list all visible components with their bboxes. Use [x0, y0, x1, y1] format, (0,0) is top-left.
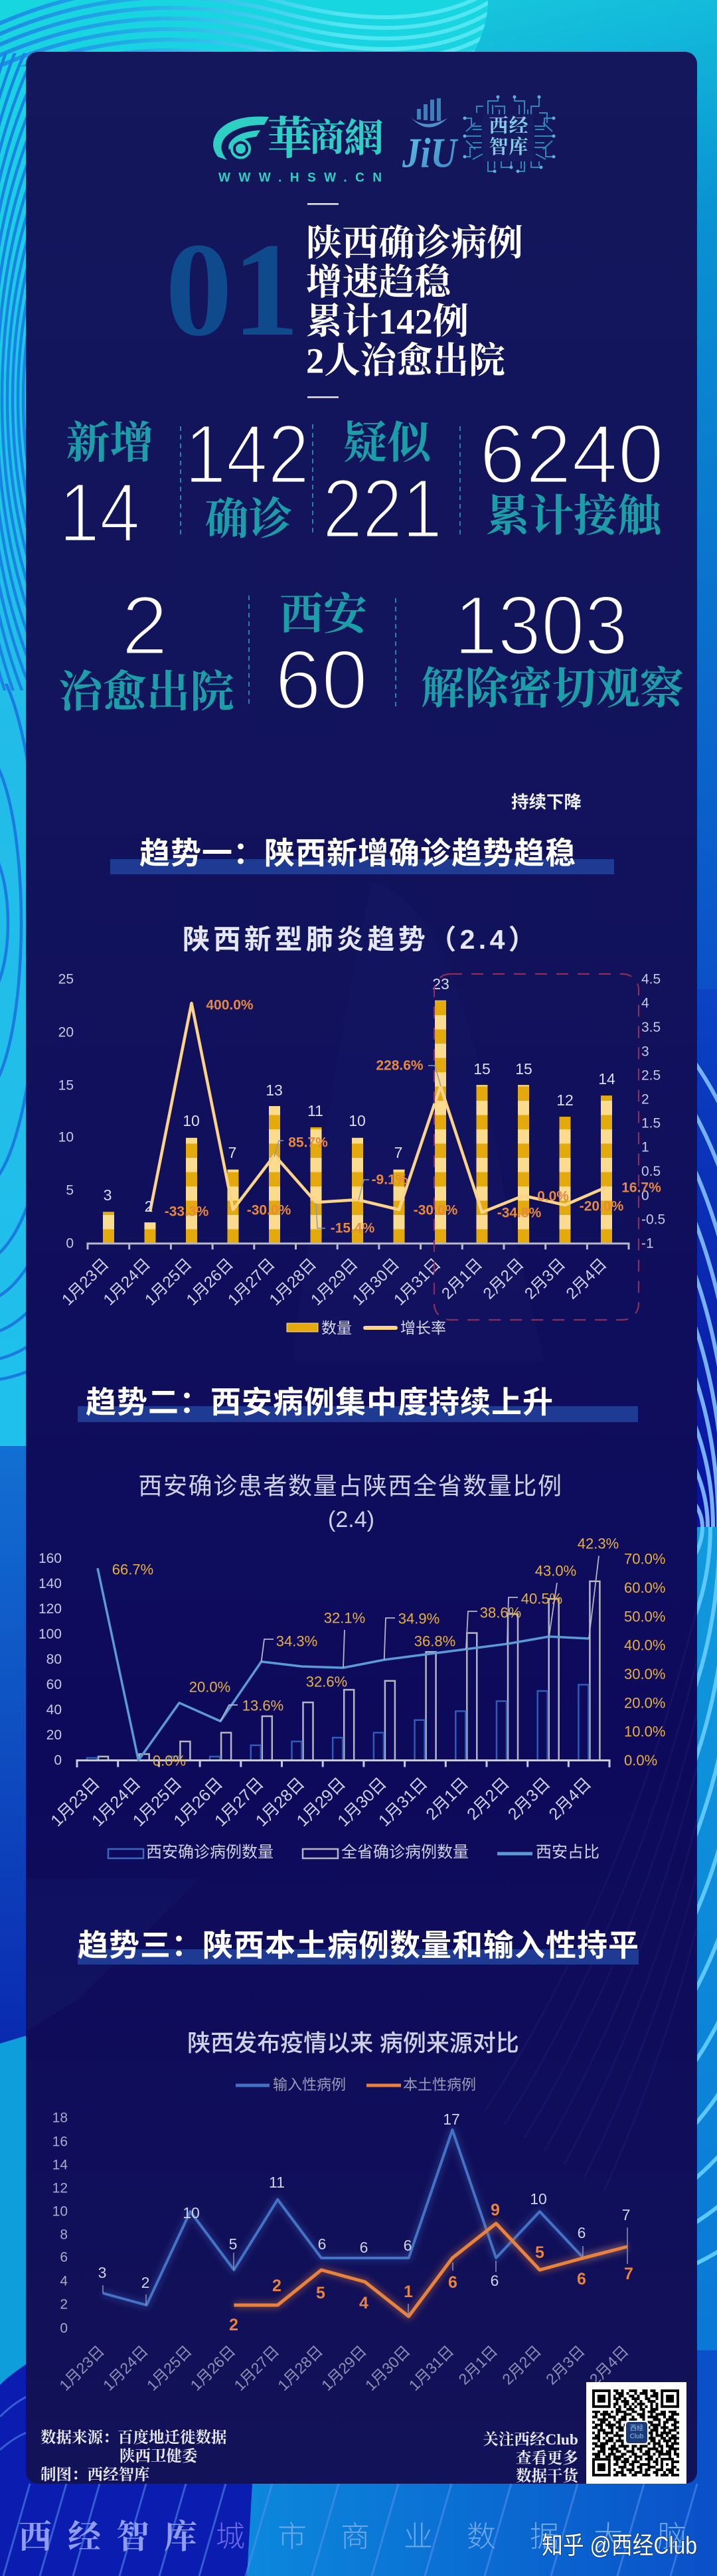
right axis: 1 [641, 1139, 649, 1155]
right axis: 3 [641, 1044, 649, 1060]
imported labels: 17 [443, 2111, 460, 2128]
right axis: 40.0% [624, 1637, 665, 1653]
chart: imported versus local cases [52, 2077, 633, 2394]
left axis: 40 [46, 1702, 62, 1718]
stat: Xi'an: 60 [275, 633, 368, 726]
legend: 数量 [321, 1319, 352, 1336]
headline: 陕西确诊病例 [306, 223, 523, 263]
bar value labels: 13 [266, 1082, 283, 1099]
heading: trend one: 趋势一：陕西新增确诊趋势趋稳 [139, 836, 576, 870]
date labels: 1月30日 [334, 1774, 390, 1830]
share labels: 36.8% [414, 1633, 455, 1649]
data sources: 数据来源： [40, 2429, 118, 2447]
date labels: 2月2日 [480, 1255, 528, 1303]
date labels: 1月27日 [211, 1774, 268, 1830]
date labels: 1月23日 [58, 1255, 113, 1309]
bar value labels: 11 [307, 1102, 323, 1119]
legend: 西安确诊病例数量 [146, 1843, 274, 1862]
left axis: 0 [66, 1236, 74, 1251]
date labels: 1月25日 [141, 1255, 196, 1309]
footer band: brand slogan: 城 [216, 2520, 245, 2553]
date labels [58, 1255, 611, 1309]
QR code [586, 2382, 686, 2484]
footer band: brand slogan: 脑 [657, 2520, 686, 2553]
imported labels: 6 [404, 2237, 412, 2254]
chart: Xi'an cases versus province [39, 1535, 665, 1862]
imported labels: 6 [578, 2224, 586, 2241]
QR code: 西经 [630, 2423, 643, 2433]
imported labels: 10 [183, 2204, 200, 2221]
stat: confirmed: 确诊 [204, 495, 292, 544]
date labels: 2月2日 [463, 1774, 513, 1824]
stat: released from observation: 1303 [454, 579, 628, 672]
share labels: 34.9% [398, 1611, 439, 1627]
imported labels: 6 [360, 2239, 368, 2256]
imported labels: 11 [269, 2174, 285, 2191]
legend [236, 2077, 476, 2093]
left axis: 120 [39, 1601, 62, 1617]
footer band: brand slogan [19, 2518, 686, 2555]
right axis: 0.5 [641, 1164, 661, 1179]
growth rate line [150, 1003, 607, 1212]
date labels: 1月27日 [224, 1255, 279, 1309]
date labels: 1月24日 [88, 1774, 145, 1830]
stat: recovered [58, 579, 234, 717]
bar value labels: 23 [432, 975, 449, 993]
legend [108, 1843, 599, 1862]
right axis: -1 [641, 1236, 654, 1251]
y axis: 12 [52, 2180, 68, 2196]
share labels: 40.5% [521, 1591, 562, 1607]
logo: huashang wordmark: 華 [267, 114, 312, 164]
growth rate labels: 16.7% [621, 1180, 661, 1195]
stats grid [58, 408, 684, 726]
local labels: 4 [359, 2294, 368, 2312]
date labels: 1月29日 [318, 2342, 370, 2394]
footer band: brand slogan: 市 [278, 2520, 307, 2553]
footer band: brand slogan: 库 [164, 2518, 197, 2555]
left axis: 10 [58, 1130, 74, 1145]
left axis: 60 [46, 1677, 62, 1692]
logo: xijing think tank: 西 [489, 115, 509, 137]
bar value labels: 15 [473, 1060, 491, 1078]
date labels: 1月27日 [230, 2342, 282, 2394]
logo: huashang wordmark: WWW.HSW.CN [218, 171, 382, 185]
stat: contacts: 6240 [479, 408, 664, 501]
imported labels: 10 [530, 2190, 547, 2208]
growth rate labels: -20.0% [580, 1199, 624, 1214]
footer band: brand slogan: 智 [116, 2518, 149, 2555]
imported labels [98, 2111, 630, 2291]
note: continuing decline: 持续下降 [511, 792, 582, 812]
local labels: 1 [404, 2283, 413, 2301]
stat: suspected [323, 420, 442, 555]
stat: suspected: 221 [323, 462, 442, 555]
share labels: 43.0% [535, 1563, 576, 1579]
footer band: brand slogan: 商 [341, 2520, 370, 2553]
local line [234, 2223, 627, 2316]
follow prompt: 关注西经Club [483, 2431, 578, 2449]
right axis [641, 972, 665, 1251]
date labels: 1月30日 [362, 2342, 414, 2394]
y axis: 16 [52, 2134, 68, 2150]
bar value labels [104, 975, 615, 1215]
date labels: 2月4日 [563, 1255, 611, 1303]
y axis: 0 [60, 2321, 68, 2336]
stat: contacts: 累计接触 [486, 493, 665, 540]
data sources: 陕西卫健委 [120, 2447, 199, 2465]
share labels: 0.0% [153, 1753, 186, 1769]
right axis: 2 [641, 1091, 649, 1107]
right axis: 30.0% [624, 1666, 665, 1682]
left axis: 140 [39, 1576, 62, 1591]
bar value labels: 7 [228, 1144, 236, 1161]
growth rate labels [165, 997, 661, 1236]
share line [98, 1568, 589, 1761]
bar value labels: 14 [598, 1070, 615, 1087]
chart title: trend: 陕西新型肺炎趋势（2.4） [183, 924, 539, 955]
right axis: 0.0% [624, 1752, 657, 1769]
stat: confirmed [185, 408, 309, 544]
left axis: 160 [39, 1551, 62, 1566]
footer band: brand slogan: 据 [530, 2520, 559, 2553]
right axis: 50.0% [624, 1608, 665, 1625]
share labels: 66.7% [112, 1562, 153, 1577]
chart title: Xi'an share: (2.4) [328, 1507, 374, 1532]
local labels: 6 [448, 2273, 457, 2292]
footer band: brand slogan: 经 [68, 2518, 102, 2555]
y axis: 14 [52, 2158, 68, 2172]
right axis: 60.0% [624, 1579, 665, 1596]
right axis: 0 [641, 1188, 649, 1203]
data sources: 制图：西经智库 [40, 2466, 150, 2484]
left axis: 100 [39, 1627, 62, 1642]
date labels: 2月1日 [422, 1774, 472, 1824]
footer band: brand slogan: 业 [404, 2520, 433, 2553]
share labels: 32.1% [324, 1609, 365, 1627]
growth rate labels: -30.0% [247, 1203, 291, 1218]
share labels: 13.6% [242, 1697, 283, 1714]
logos [213, 96, 555, 185]
leader lines [274, 1066, 441, 1228]
x axis [77, 1761, 609, 1767]
right axis: 4.5 [641, 972, 661, 987]
right axis: 1.5 [641, 1115, 661, 1131]
footer band: brand slogan: 西 [19, 2518, 52, 2555]
share labels [112, 1535, 619, 1769]
data sources: 百度地迁徙数据 [118, 2428, 227, 2447]
imported labels: 6 [491, 2272, 499, 2289]
growth rate labels: 0.0% [537, 1188, 569, 1204]
chart title: Xi'an share: 西安确诊患者数量占陕西全省数量比例 [138, 1473, 563, 1499]
stat: confirmed: 142 [185, 408, 309, 501]
date labels: 1月31日 [406, 2342, 457, 2394]
logo: JiU: JiU [402, 129, 458, 177]
bar value labels: 7 [394, 1144, 402, 1161]
right axis: 70.0% [624, 1551, 665, 1567]
y axis [52, 2110, 68, 2336]
y axis: 10 [52, 2204, 68, 2219]
local labels: 2 [229, 2316, 238, 2334]
date labels: 1月26日 [170, 1774, 226, 1830]
date labels: 1月26日 [183, 1255, 237, 1309]
date labels: 2月3日 [542, 2342, 588, 2388]
heading: trend three: 趋势三：陕西本土病例数量和输入性持平 [78, 1928, 639, 1963]
legend: 增长率 [400, 1319, 446, 1336]
imported labels: 5 [229, 2235, 237, 2253]
footer band: brand slogan: 数 [467, 2520, 496, 2553]
local labels: 2 [272, 2277, 281, 2295]
date labels: 1月30日 [349, 1255, 403, 1309]
legend: 全省确诊病例数量 [341, 1843, 469, 1862]
stat: recovered: 2 [121, 579, 168, 672]
y axis: 18 [52, 2110, 68, 2126]
left axis: 20 [46, 1728, 62, 1743]
bar value labels: 15 [515, 1060, 532, 1078]
province bars [98, 1581, 599, 1761]
date labels: 2月1日 [455, 2342, 501, 2388]
right axis: 10.0% [624, 1724, 665, 1739]
y axis: 6 [60, 2249, 68, 2265]
growth rate labels: 228.6% [376, 1058, 424, 1073]
growth rate labels: -33.3% [165, 1204, 209, 1219]
local labels: 7 [624, 2265, 633, 2283]
legend: 西安占比 [536, 1843, 599, 1862]
local labels: 5 [535, 2243, 544, 2262]
date labels: 2月4日 [545, 1774, 595, 1824]
bar value labels: 10 [349, 1112, 366, 1129]
growth rate labels: 85.7% [288, 1135, 328, 1150]
left axis: 25 [58, 972, 74, 987]
bar value labels: 10 [183, 1112, 200, 1129]
share labels: 32.6% [306, 1673, 347, 1690]
left axis: 20 [58, 1025, 74, 1040]
right axis: 3.5 [641, 1020, 661, 1035]
growth rate labels: -15.4% [331, 1220, 375, 1236]
left axis: 5 [66, 1183, 74, 1198]
section number 01: 01 [165, 215, 299, 364]
stat: Xi'an: 西安 [279, 591, 369, 639]
imported line [103, 2130, 627, 2305]
leader lines [220, 1556, 599, 1721]
date labels: 1月29日 [293, 1774, 349, 1830]
logo: xijing think tank: 智 [489, 136, 509, 158]
date labels: 1月24日 [100, 1255, 154, 1309]
date labels: 2月2日 [499, 2342, 544, 2388]
date labels: 1月24日 [100, 2342, 151, 2394]
headline: 2人治愈出院 [306, 340, 505, 381]
bars [103, 1001, 612, 1244]
headline: 累计142例 [306, 301, 469, 341]
date labels: 1月31日 [390, 1255, 445, 1309]
local labels [229, 2201, 633, 2334]
x axis [88, 1244, 629, 1249]
growth rate labels: -9.1% [372, 1172, 408, 1187]
local labels: 5 [316, 2284, 325, 2302]
date labels: 1月25日 [129, 1774, 185, 1830]
logo: xijing think tank: 库 [509, 136, 528, 158]
date labels: 1月28日 [252, 1774, 308, 1830]
growth rate labels: 400.0% [206, 997, 254, 1013]
legend [287, 1319, 446, 1336]
date labels: 2月1日 [438, 1255, 486, 1303]
right axis: 4 [641, 996, 649, 1010]
growth rate labels: -34.8% [497, 1206, 542, 1220]
date labels: 1月28日 [266, 1255, 320, 1309]
stat: Xi'an [275, 591, 369, 726]
imported labels: 7 [622, 2206, 630, 2223]
logo: xijing think tank [463, 96, 555, 173]
y axis: 4 [60, 2273, 68, 2289]
local labels: 6 [577, 2270, 586, 2289]
heading: trend two: 趋势二：西安病例集中度持续上升 [86, 1385, 554, 1419]
chart title: Xi'an share [138, 1473, 563, 1532]
local labels: 9 [491, 2201, 500, 2219]
legend: 本土性病例 [403, 2077, 476, 2093]
stat: contacts [479, 408, 665, 540]
leader lines [103, 2227, 627, 2316]
left axis: 80 [46, 1652, 62, 1667]
stat: suspected: 疑似 [343, 420, 434, 467]
date labels: 2月3日 [521, 1255, 569, 1303]
footer band: brand slogan: 大 [594, 2520, 623, 2553]
stat: released from observation [421, 579, 684, 713]
logo: huashang wordmark: 網 [344, 117, 384, 161]
date labels: 1月28日 [274, 2342, 326, 2394]
y axis: 2 [60, 2297, 68, 2312]
follow prompt [483, 2431, 580, 2485]
follow prompt: 数据干货 [516, 2467, 580, 2485]
bar value labels: 2 [145, 1198, 153, 1215]
date labels: 1月23日 [56, 2342, 108, 2394]
right axis [624, 1551, 665, 1769]
date labels [47, 1774, 595, 1830]
share labels: 20.0% [189, 1678, 230, 1696]
date labels [56, 2342, 632, 2394]
y axis: 8 [60, 2227, 68, 2243]
headline: 增速趋稳 [306, 262, 453, 303]
logo: JiU [402, 98, 458, 177]
highlight box [434, 974, 639, 1320]
stat: new cases: 新增 [66, 420, 154, 467]
date labels: 2月3日 [505, 1774, 554, 1824]
imported labels: 6 [318, 2235, 326, 2253]
follow prompt: 查看更多 [516, 2449, 578, 2467]
share labels: 42.3% [578, 1535, 619, 1552]
chart: new cases bars and growth rate line [58, 972, 665, 1336]
date labels: 1月29日 [307, 1255, 362, 1309]
date labels: 2月4日 [586, 2342, 632, 2388]
date labels: 1月25日 [143, 2342, 195, 2394]
left axis: 15 [58, 1078, 74, 1093]
logo: xijing think tank: 经 [509, 115, 528, 137]
chart title: case source: 陕西发布疫情以来 病例来源对比 [187, 2030, 519, 2057]
logo: huashang wordmark: 商 [309, 118, 346, 159]
date labels: 1月23日 [47, 1774, 104, 1830]
imported labels: 3 [98, 2264, 106, 2281]
left axis: 0 [54, 1753, 62, 1768]
stat: released from observation: 解除密切观察 [421, 665, 684, 713]
right axis: -0.5 [641, 1212, 665, 1227]
headline [306, 203, 523, 398]
stat: recovered: 治愈出院 [58, 668, 234, 717]
date labels: 1月31日 [375, 1774, 431, 1830]
logo: huashang wordmark [218, 114, 384, 185]
imported labels: 2 [141, 2274, 149, 2291]
legend: 输入性病例 [273, 2077, 346, 2093]
share labels: 38.6% [480, 1604, 521, 1621]
date labels: 1月26日 [187, 2342, 239, 2394]
left axis [39, 1551, 62, 1768]
QR code: Club [630, 2433, 644, 2441]
right axis: 2.5 [641, 1068, 661, 1084]
growth rate labels: -30.0% [414, 1203, 458, 1218]
logo: huashang icon [213, 116, 269, 160]
right axis: 20.0% [624, 1694, 665, 1712]
watermark: 知乎 @西经Club [542, 2532, 697, 2559]
stat: new cases: 14 [59, 466, 140, 559]
Xi'an bars [87, 1685, 588, 1761]
data sources [40, 2428, 227, 2484]
left axis [58, 972, 74, 1251]
bar value labels: 12 [556, 1091, 574, 1109]
bar value labels: 3 [104, 1186, 112, 1204]
stat: new cases [59, 420, 154, 559]
share labels: 34.3% [276, 1633, 317, 1649]
